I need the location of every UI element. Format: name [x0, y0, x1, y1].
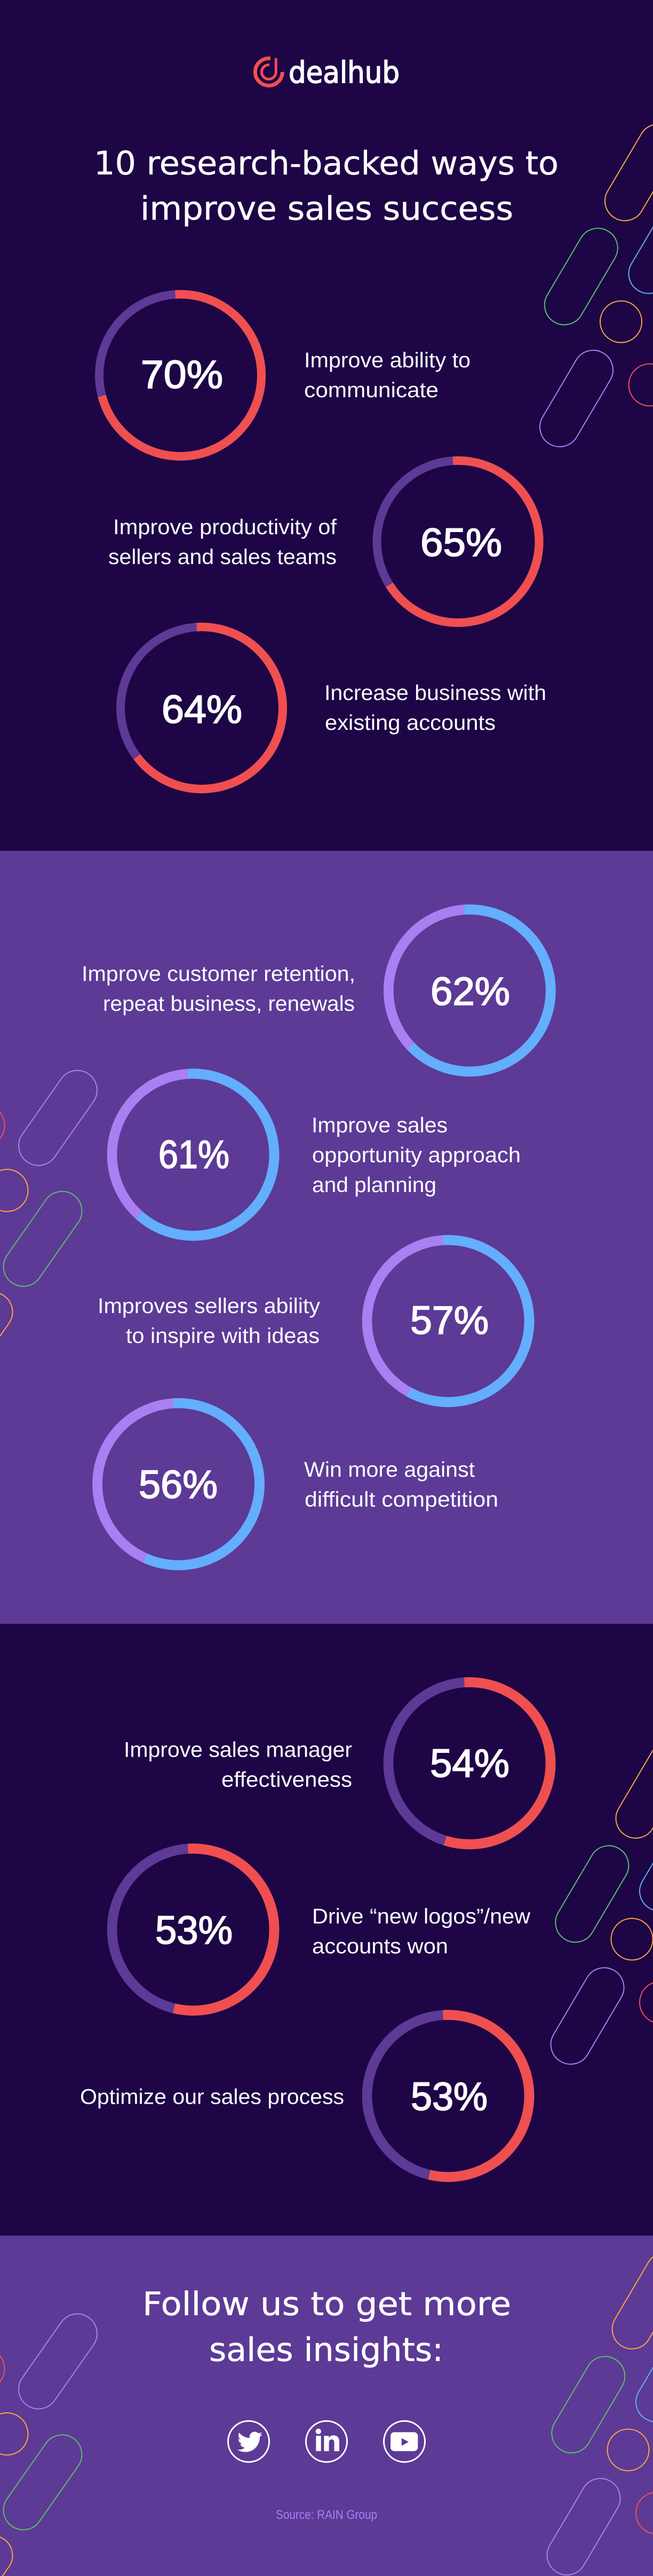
stat ring: 61%: 61%	[158, 1132, 229, 1177]
heading: follow us: sales insights:	[209, 2331, 443, 2369]
text: existing accounts: existing accounts	[325, 711, 496, 735]
stat ring: 70%	[94, 289, 266, 461]
stat ring: 54%: 54%	[430, 1741, 509, 1785]
text: retention	[82, 962, 355, 1016]
stat ring: 70%: 70%	[141, 352, 223, 397]
heading: follow us	[142, 2285, 511, 2369]
stat ring: 54%	[384, 1677, 555, 1849]
panel: footer	[0, 2236, 653, 2576]
text: new logos	[312, 1905, 530, 1958]
text: new logos: accounts won	[312, 1935, 448, 1958]
stat ring: 65%: 65%	[420, 520, 502, 565]
decoration: left pills	[0, 2306, 105, 2576]
stat ring: 53% new logos: 53%	[155, 1908, 233, 1952]
panel: top section	[95, 57, 653, 793]
text: existing accounts	[324, 681, 546, 735]
title	[94, 144, 559, 228]
stat ring: 64%: 64%	[162, 687, 242, 731]
stat ring: 53% new logos	[107, 1844, 279, 2016]
stat ring: 56%: 56%	[139, 1462, 218, 1507]
panel: third section	[81, 1677, 653, 2182]
source note: Source: RAIN Group	[276, 2508, 377, 2522]
stat ring: 53% sales process: 53%	[411, 2074, 488, 2119]
title: improve sales success	[140, 190, 513, 228]
text: manager: Improve sales manager	[124, 1738, 352, 1761]
title: 10 research-backed ways to	[94, 144, 559, 182]
text: retention: repeat business, renewals	[103, 992, 355, 1016]
stat ring: 62%	[384, 905, 556, 1076]
text: retention: Improve customer retention,	[82, 962, 355, 986]
text: opportunity: Improve sales	[312, 1114, 448, 1137]
decoration: right pills	[532, 117, 653, 454]
heading: follow us: Follow us to get more	[142, 2285, 511, 2323]
icon: youtube	[384, 2421, 425, 2462]
decoration: right pills	[544, 1734, 653, 2072]
stat ring: 53% sales process	[362, 2010, 534, 2182]
decoration: left pills	[0, 1069, 98, 1337]
stat ring: 61%	[107, 1069, 279, 1241]
stat ring: 56%	[92, 1398, 265, 1570]
text: sales process: Optimize our sales process	[80, 2086, 344, 2109]
text: productivity	[108, 516, 337, 569]
stat ring: 64%	[116, 622, 288, 794]
icon: dealhub mark	[255, 58, 282, 85]
logo: dealhub	[255, 55, 400, 90]
text: improve ability: Improve ability to	[304, 349, 471, 372]
icon: linkedin	[306, 2421, 347, 2462]
wordmark: dealhub	[289, 55, 400, 90]
text: opportunity	[312, 1114, 521, 1197]
text: competition: difficult competition	[305, 1488, 498, 1511]
text: competition: Win more against	[304, 1458, 475, 1482]
text: inspire: to inspire with ideas	[126, 1324, 320, 1348]
decoration: right pills	[540, 2245, 653, 2576]
panel: second section	[0, 851, 653, 1624]
stat ring: 65%	[372, 456, 544, 627]
text: improve ability	[304, 349, 471, 402]
text: productivity: Improve productivity of	[113, 516, 337, 539]
stat ring: 57%: 57%	[410, 1298, 489, 1342]
text: manager: effectiveness	[221, 1768, 352, 1791]
text: opportunity: opportunity approach	[312, 1144, 521, 1167]
text: opportunity: and planning	[312, 1173, 436, 1197]
text: new logos: Drive “new logos”/new	[312, 1905, 530, 1928]
text: inspire: Improves sellers ability	[98, 1294, 320, 1318]
text: existing accounts: Increase business with	[324, 681, 546, 705]
icon: twitter	[228, 2421, 269, 2462]
stat ring: 62%: 62%	[431, 969, 510, 1013]
text: manager	[124, 1738, 352, 1791]
text: inspire	[98, 1294, 320, 1348]
text: productivity: sellers and sales teams	[108, 545, 337, 569]
text: competition	[304, 1458, 498, 1511]
text: improve ability: communicate	[304, 379, 439, 402]
stat ring: 57%	[362, 1235, 534, 1407]
